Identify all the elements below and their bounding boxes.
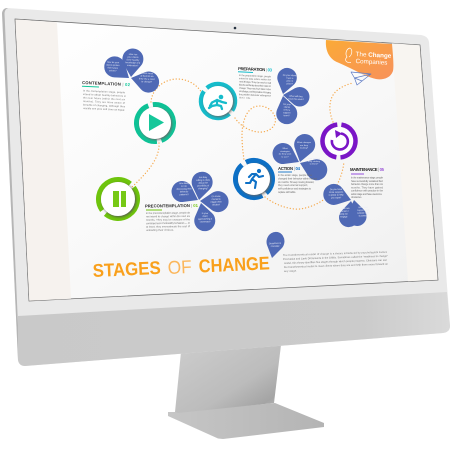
petal text: crossroad? xyxy=(200,220,211,223)
petal text: Do your clients xyxy=(283,74,298,77)
petal text: keep clients xyxy=(339,212,352,216)
petal text: need this week? xyxy=(288,98,305,101)
disc xyxy=(102,183,136,217)
precontemplation petals xyxy=(168,170,229,233)
petal text: doubts? xyxy=(212,203,221,206)
petal label: Questions to xyxy=(269,242,282,245)
petal text: approaching a xyxy=(198,217,213,221)
white disc xyxy=(139,107,171,139)
petal text: support and xyxy=(357,209,370,212)
heading: CONTEMPLATION | 02 xyxy=(82,80,131,87)
petal xyxy=(121,47,144,78)
body: next 30 days. They can reach or call xyxy=(239,80,271,85)
questions petal xyxy=(263,230,286,260)
preparation petals xyxy=(273,66,310,126)
petal text: you cope? xyxy=(331,197,342,199)
petal text: are they xyxy=(300,144,309,147)
intro paragraph xyxy=(283,251,389,273)
disc xyxy=(204,87,234,117)
petal text: clients xyxy=(284,106,291,109)
petal text: Which areas xyxy=(141,72,154,75)
maintenance petals xyxy=(321,181,370,228)
bezel xyxy=(2,8,450,366)
petal text: is it to xyxy=(181,185,188,188)
petal text: need a xyxy=(283,109,291,112)
petal text: making? xyxy=(300,148,309,150)
petal text: What are xyxy=(341,207,350,210)
white disc xyxy=(203,86,233,116)
title: OF xyxy=(167,256,192,278)
petal xyxy=(168,177,203,209)
dotted journey paths xyxy=(132,79,353,209)
body: they need external support, xyxy=(278,184,308,187)
petal text: team? xyxy=(284,114,290,117)
refresh arrow xyxy=(332,130,348,149)
body: In the precontemplation stage, people do xyxy=(146,212,191,215)
body xyxy=(278,174,317,194)
petal text: support xyxy=(283,111,291,115)
body: their life. xyxy=(239,96,251,100)
petal text: trigger their xyxy=(211,200,222,204)
petal text: close healthy xyxy=(126,58,140,62)
petal text: in place to help xyxy=(329,193,344,197)
underline xyxy=(238,71,253,74)
petal text: about the xyxy=(199,182,208,185)
title: STAGES xyxy=(92,257,161,281)
stage 3: crawl icon xyxy=(194,77,242,125)
petal text: motivation? xyxy=(127,64,139,67)
petal xyxy=(200,191,229,212)
body: benefits of changing, although they xyxy=(83,104,126,108)
paper plane icon xyxy=(351,72,371,85)
running figure xyxy=(246,169,263,188)
petal text: How do your xyxy=(107,61,119,64)
petal label: Consider xyxy=(271,245,280,248)
body: the near future (within the next six xyxy=(83,97,126,101)
white disc xyxy=(238,163,270,195)
petal text: What xyxy=(282,147,288,150)
petal text: they see a need xyxy=(139,77,155,81)
petal text: clients picture xyxy=(106,64,120,67)
screen background xyxy=(15,19,438,301)
petal text: selves? xyxy=(109,70,117,73)
body: action stage and have overcome xyxy=(351,193,383,196)
petal text: willing to think xyxy=(196,179,211,182)
body: In the preparation stage, people xyxy=(239,74,272,78)
petal xyxy=(273,94,299,126)
petal text: to change? xyxy=(141,80,153,84)
petal text: sustain their xyxy=(357,211,369,215)
petal text: How well are xyxy=(308,157,321,160)
camera xyxy=(234,27,236,29)
body: months. They have gained xyxy=(351,186,384,189)
petal text: do they want xyxy=(279,153,292,156)
title: CHANGE xyxy=(198,252,270,276)
petal xyxy=(344,198,368,228)
screen xyxy=(15,19,438,301)
petal text: have a xyxy=(287,78,294,80)
chin xyxy=(18,292,450,366)
petal text: their future xyxy=(108,66,119,70)
body xyxy=(146,212,191,232)
body: not intend to change within the next six xyxy=(146,215,191,218)
intro paragraph: Prochaska and Carlo DiClemente in the 1980s. Sometimes called the “readiness to change” xyxy=(283,255,388,261)
right beige strip xyxy=(392,43,438,281)
underline xyxy=(82,85,99,88)
body: at least, they overestimate the cost of xyxy=(146,225,190,229)
orange blob xyxy=(326,40,393,79)
body: have successfully sustained their xyxy=(351,180,383,183)
ring xyxy=(135,103,175,143)
intro paragraph: model, this theory identifies five stages through which people progress. Clinicians can use xyxy=(284,259,388,265)
body: six months. To keep moving forward, xyxy=(278,181,314,184)
petal xyxy=(129,68,161,95)
petal text: moments xyxy=(212,198,221,201)
body: months). They are more aware of xyxy=(83,100,125,105)
petal text: knowledge and xyxy=(125,62,141,65)
body: intend to adopt healthy behaviors in xyxy=(83,93,127,98)
title xyxy=(92,252,270,281)
stage 4: runner icon xyxy=(229,154,279,204)
disc xyxy=(239,164,271,196)
petal text: your clients xyxy=(127,56,139,59)
petal text: plan in xyxy=(287,80,294,83)
body: usually see pros and cons as equal. xyxy=(83,107,125,112)
petal xyxy=(189,170,214,202)
intro paragraph: any stage. xyxy=(284,270,297,273)
petal text: Is your xyxy=(202,212,209,215)
underline xyxy=(278,171,292,173)
petal text: engaged? xyxy=(340,216,351,218)
monitor stand xyxy=(168,345,324,439)
petal text: possibility of xyxy=(197,184,210,188)
petal xyxy=(290,132,318,165)
stage 2: play icon xyxy=(135,103,175,143)
heading: MAINTENANCE | 05 xyxy=(350,167,385,172)
heading: PREPARATION | 03 xyxy=(238,66,273,73)
petal shape xyxy=(263,230,286,260)
heading: ACTION | 04 xyxy=(278,166,301,171)
petal text: some supports xyxy=(329,191,344,194)
body: obstacles. xyxy=(351,196,362,199)
logo text: The Change xyxy=(355,51,392,60)
ring xyxy=(91,172,145,226)
petal text: patterns? xyxy=(180,193,190,196)
petal text: Do your xyxy=(283,103,291,106)
body: small steps, and they believe changing xyxy=(239,90,272,94)
petal xyxy=(191,201,217,233)
intro paragraph: the transtheoretical model to meet clients where they are and help them move forward on xyxy=(284,263,389,269)
body: intend to take action within the xyxy=(239,77,272,82)
petal text: to use? xyxy=(281,155,289,158)
pause bars xyxy=(113,191,126,207)
infographic content xyxy=(82,40,393,281)
ring xyxy=(320,122,358,160)
ring xyxy=(194,77,242,125)
body: replace old habits. xyxy=(278,191,296,194)
body: In the action stage, people have xyxy=(278,174,313,177)
body: consequences of unhealthy behaviors — or xyxy=(146,222,190,225)
petal xyxy=(269,139,304,171)
white disc xyxy=(101,182,135,216)
petal text: discussing their xyxy=(177,187,192,191)
body: In the maintenance stage, people xyxy=(351,176,384,180)
stage 1: pause icon xyxy=(91,172,145,226)
white disc xyxy=(325,127,353,155)
logo mark xyxy=(346,48,352,63)
petal xyxy=(338,200,361,228)
petal text: to them? xyxy=(310,163,319,166)
body: confidence with practice in the xyxy=(351,190,384,193)
logo text line 2: Companies xyxy=(355,58,388,67)
petal text: they sticking xyxy=(308,160,321,163)
precontemplation text block xyxy=(145,203,199,232)
body: the problem behavior will improve xyxy=(239,93,272,98)
petal text: success? xyxy=(359,215,369,217)
contemplation petals xyxy=(100,47,161,95)
stand neck xyxy=(175,345,281,413)
body: In the contemplation stage, people xyxy=(83,90,126,94)
logo badge xyxy=(326,40,393,79)
petal text: strategies xyxy=(280,150,291,153)
body: unloading their choices. xyxy=(146,229,174,232)
petal text: place? xyxy=(286,83,294,86)
crawling figure xyxy=(209,95,226,109)
contemplation text block xyxy=(82,80,131,112)
heading: PRECONTEMPLATION | 01 xyxy=(145,203,199,208)
petal xyxy=(296,153,330,183)
ring xyxy=(229,154,279,204)
action petals xyxy=(269,132,330,183)
petal text: What can xyxy=(358,206,368,209)
petal text: Are they xyxy=(199,176,208,179)
petal text: What will they xyxy=(289,95,304,98)
body: changed their behavior within the last xyxy=(278,177,317,180)
body xyxy=(83,90,127,112)
petal text: Do some xyxy=(212,196,221,198)
petal text: of their life do xyxy=(140,75,154,78)
petal xyxy=(282,85,310,107)
intro paragraph: The transtheoretical model of change is a theory introduced by psychologists James xyxy=(283,251,388,257)
petal text: How likely xyxy=(179,183,190,185)
petal text: behavior xyxy=(180,190,189,193)
body: behavior change more than six xyxy=(351,183,384,186)
petal xyxy=(274,66,299,96)
body: self-confidence and strategies to xyxy=(278,188,312,191)
maintenance text block xyxy=(350,167,385,199)
body: friends and family about their vision to xyxy=(239,84,272,88)
body: months. They may be unaware of the xyxy=(146,218,191,222)
left beige strip xyxy=(15,19,71,301)
underline xyxy=(146,209,162,211)
petal text: How can xyxy=(129,54,138,56)
left edge xyxy=(2,8,20,360)
stand base xyxy=(168,403,324,439)
stage 5: refresh icon xyxy=(320,122,358,160)
body: change. They may have taken a few xyxy=(239,87,271,91)
disc xyxy=(140,108,172,140)
body xyxy=(239,74,272,100)
petal xyxy=(321,181,354,210)
body xyxy=(351,176,384,199)
petal text: What changes xyxy=(297,141,312,144)
petal xyxy=(100,52,135,86)
action text block xyxy=(278,166,317,194)
play triangle xyxy=(149,114,164,131)
petal text: client xyxy=(202,215,208,218)
petal text: barriers to xyxy=(340,210,351,213)
petal text: Do you have xyxy=(330,189,343,191)
preparation text block xyxy=(238,66,273,100)
underline xyxy=(351,173,364,175)
petal text: changing? xyxy=(198,188,209,190)
monitor body xyxy=(2,8,450,366)
